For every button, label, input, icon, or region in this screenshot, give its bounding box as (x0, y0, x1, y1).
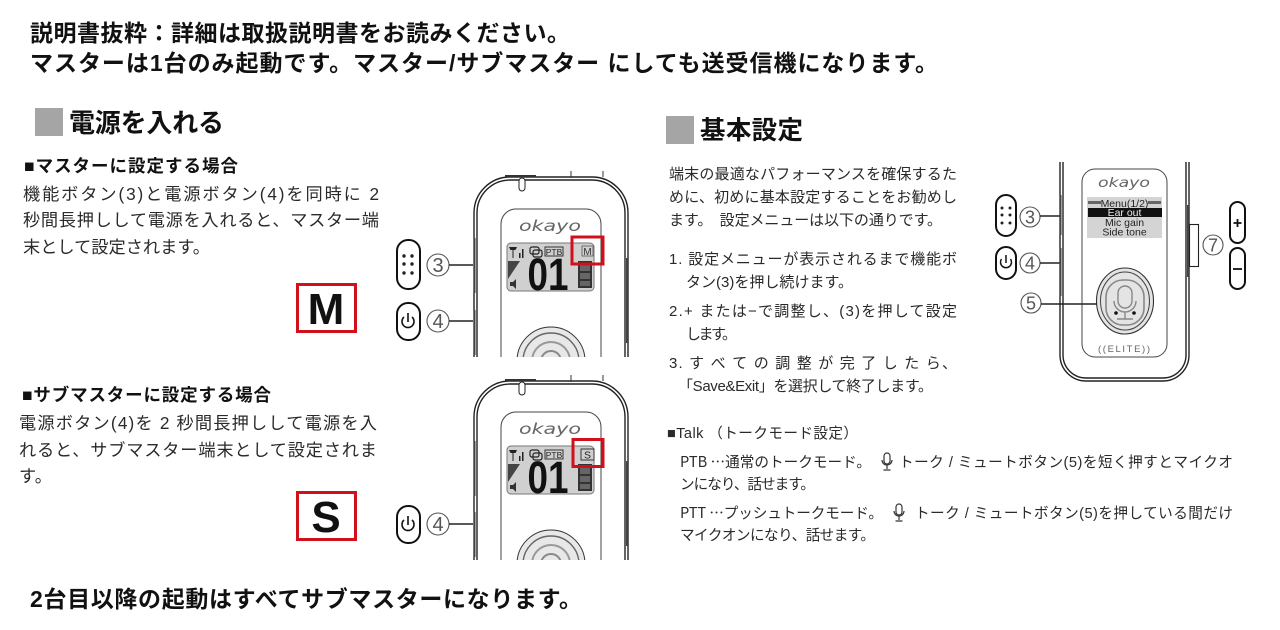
label: 4: 4 (432, 311, 444, 333)
device body: okayo (1098, 176, 1150, 191)
text block: talk mode: トーク / ミュートボタン(5)を短く押すとマイクオ (899, 454, 1233, 471)
text block: talk mode: PTB …通常のトークモード。 (680, 451, 871, 472)
text block: submaster setting: 電源ボタン(4)を 2 秒間長押しして電源を入 (19, 413, 377, 433)
label: 5: 5 (1026, 294, 1036, 314)
callout: S: S (311, 493, 341, 542)
callout: M: M (308, 285, 344, 334)
text block: talk mode: PTT …プッシュトークモード。 (680, 502, 883, 523)
icon: power button (996, 247, 1016, 279)
label: 3: 3 (1025, 208, 1035, 228)
device body: ((ELITE)) (1098, 344, 1150, 355)
text block: steps: 1. 設定メニューが表示されるまで機能ボ (669, 251, 957, 268)
text block: talk mode: トーク / ミュートボタン(5)を押している間だけ (915, 505, 1233, 522)
callout: S (298, 492, 356, 542)
device diagram: settings (995, 162, 1246, 382)
text block: steps: タン(3)を押し続けます。 (686, 274, 853, 291)
title (30, 20, 938, 76)
highlight: S indicator (573, 440, 603, 466)
device body: Ear out (1108, 207, 1142, 219)
label: 4: 4 (1025, 254, 1035, 274)
label: 4 (427, 513, 449, 536)
label: 3: 3 (432, 255, 444, 277)
label: 3 (1020, 207, 1040, 228)
label: 3 (427, 254, 449, 277)
icon: minus button (1230, 248, 1245, 289)
LCD (507, 446, 594, 494)
icon: mic (894, 504, 904, 521)
text block: master setting: 機能ボタン(3)と電源ボタン(4)を同時に 2 (23, 184, 379, 204)
text block: intro: めに、初めに基本設定することをお勧めし (669, 189, 957, 206)
icon: function button (397, 240, 420, 289)
text block: talk mode (667, 425, 1233, 544)
label: 4 (427, 310, 449, 333)
title: 説明書抜粋：詳細は取扱説明書をお読みください。 (30, 20, 570, 46)
text block: master setting: 末として設定されます。 (23, 237, 210, 257)
text block: talk mode: ■Talk （トークモード設定） (667, 425, 858, 442)
device body (1059, 162, 1190, 382)
mic button (516, 326, 586, 357)
text block: master setting: ■マスターに設定する場合 (24, 156, 238, 176)
device body (473, 375, 629, 560)
mic button (516, 530, 586, 560)
device body: S (584, 450, 591, 462)
footer note: 2台目以降の起動はすべてサブマスターになります。 (30, 586, 582, 612)
device diagram: submaster (396, 375, 629, 560)
device body: Mic gain (1105, 217, 1144, 229)
label: 4 (1020, 253, 1040, 274)
highlight: M indicator (572, 237, 603, 264)
mic button (1096, 268, 1154, 334)
icon: plus button (1230, 202, 1245, 243)
device body: 01 (528, 249, 568, 300)
panel: power on (20, 108, 629, 560)
icon: power button (397, 506, 420, 543)
text block: intro: ます。 設定メニューは以下の通りです。 (669, 212, 942, 229)
text block: steps: 「Save&Exit」を選択して終了します。 (678, 378, 933, 395)
icon: power button (397, 303, 420, 340)
device body: Menu(1/2) (1101, 198, 1148, 210)
device body: okayo (519, 420, 581, 438)
label: 4: 4 (432, 514, 444, 536)
title: マスターは1台のみ起動です。マスター/サブマスター にしても送受信機になります。 (30, 50, 938, 76)
text block: steps: します。 (686, 326, 737, 343)
heading: basic settings: 基本設定 (700, 117, 803, 145)
bracket: volume keys (1190, 224, 1198, 266)
text block: talk mode: マイクオンになり、話せます。 (680, 527, 875, 544)
callout: M (298, 284, 356, 334)
text block: submaster setting: す。 (19, 466, 52, 486)
device body: okayo (519, 217, 581, 235)
text block: intro: 端末の最適なパフォーマンスを確保するた (669, 166, 957, 183)
LCD (507, 243, 594, 291)
heading: power on: 電源を入れる (69, 108, 224, 138)
icon: mic (882, 453, 892, 470)
panel: basic settings (666, 116, 1246, 542)
device body (473, 171, 629, 357)
device body: PTB (546, 247, 563, 257)
text block: master setting: 秒間長押しして電源を入れると、マスター端 (23, 210, 379, 230)
text block: master setting (23, 156, 379, 257)
device body: Side tone (1102, 226, 1147, 238)
text block: intro (669, 166, 957, 229)
icon: function button (996, 195, 1016, 236)
text block: steps (669, 251, 957, 395)
label: 5 (1021, 293, 1041, 314)
text block: submaster setting: ■サブマスターに設定する場合 (22, 385, 272, 405)
device diagram: master (396, 171, 629, 357)
text block: steps: 3. す べ て の 調 整 が 完 了 し た ら、 (669, 355, 957, 372)
device body: PTB (546, 450, 563, 460)
LCD menu (1087, 197, 1162, 238)
label: 7 (1203, 235, 1223, 256)
device body: M (583, 247, 592, 258)
label: 7: 7 (1208, 236, 1218, 256)
text block: submaster setting (19, 385, 377, 486)
text block: talk mode: ンになり、話せます。 (680, 476, 815, 493)
text block: steps: 2.+ または−で調整し、(3)を押して設定 (669, 303, 957, 320)
device body: 01 (528, 452, 568, 503)
text block: submaster setting: れると、サブマスター端末として設定されま (19, 440, 377, 460)
